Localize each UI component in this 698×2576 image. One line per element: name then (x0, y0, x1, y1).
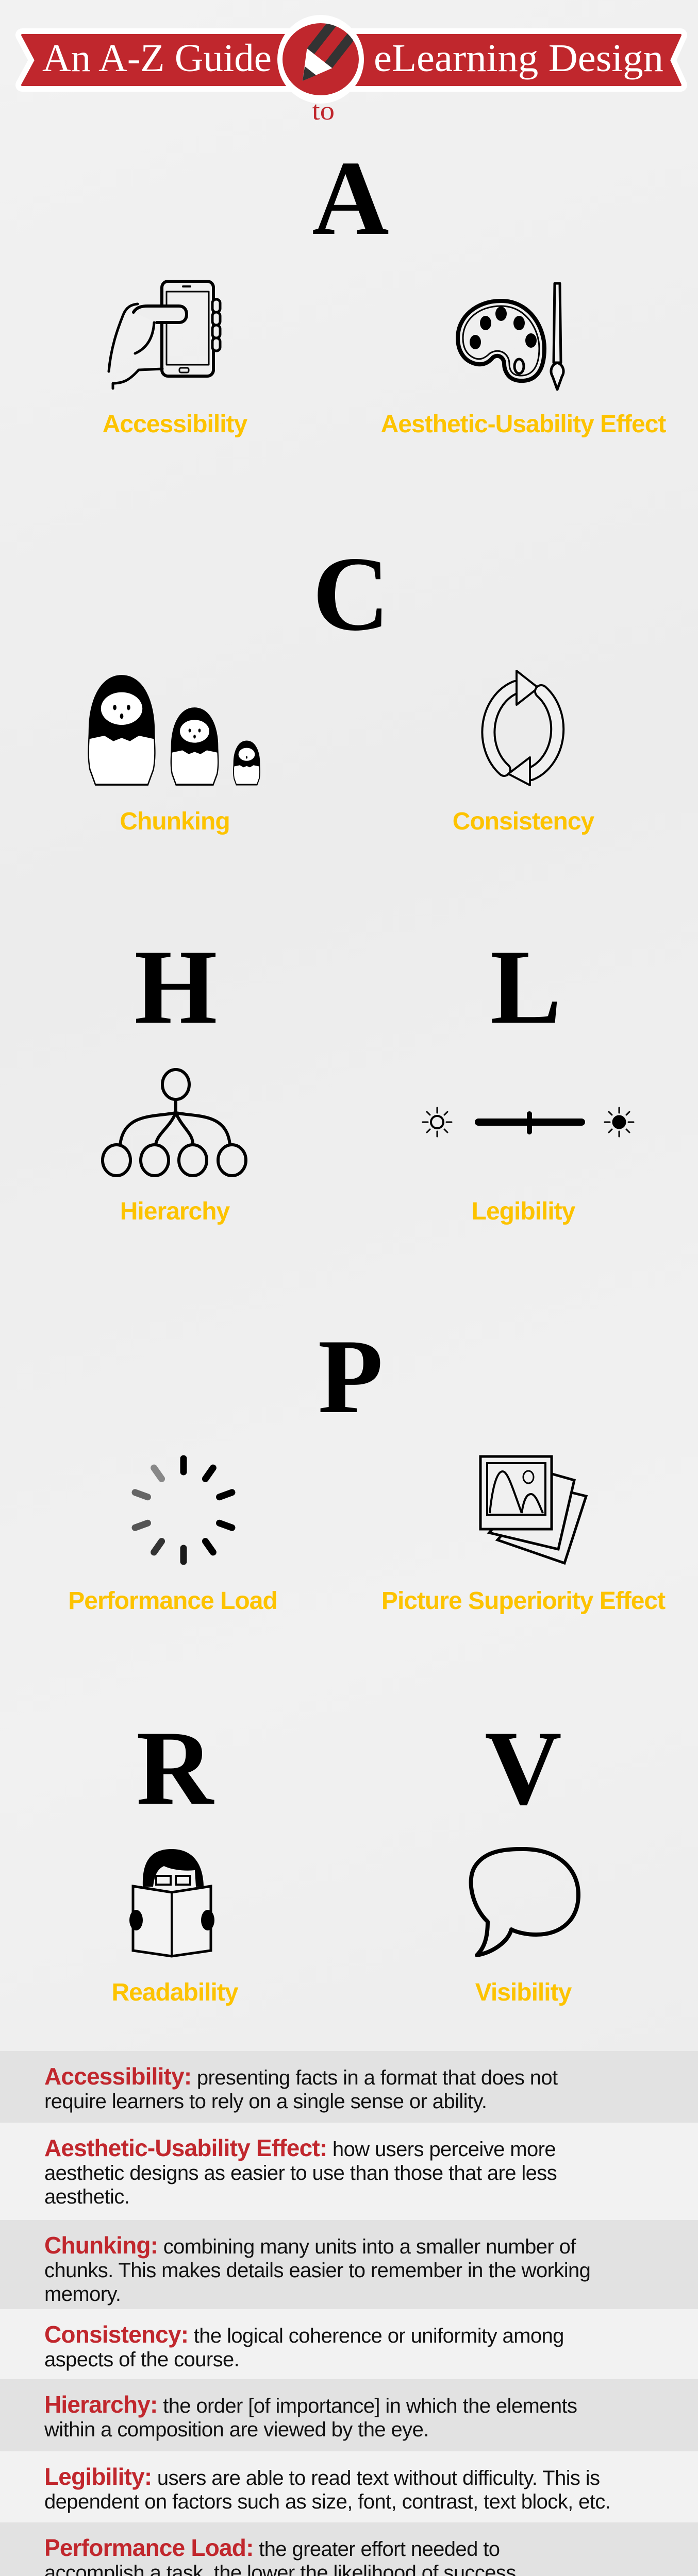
icon: speech bubble (471, 1849, 578, 1955)
icon: hand holding phone (109, 281, 220, 388)
definition: Legibility (0, 2451, 698, 2522)
icon: loading spinner (135, 1459, 232, 1562)
section: H and L (101, 943, 634, 1225)
definition: Chunking (0, 2220, 698, 2309)
label: Legibility: Legibility (472, 1198, 576, 1225)
section: P (68, 1334, 666, 1615)
definition: Chunking: memory. (44, 2283, 121, 2306)
definition: Legibility: Legibility: users are able to read text without difficulty. This is (44, 2463, 600, 2490)
label: Readability: Readability (111, 1979, 239, 2006)
icon: person reading (129, 1849, 214, 1956)
glossary panel (0, 2051, 698, 2576)
icon: stacked photos (480, 1456, 586, 1563)
label: Aesthetic-Usability Effect: Aesthetic-Usability Effect (381, 411, 666, 438)
doll large (89, 676, 155, 785)
definition: Consistency: aspects of the course. (44, 2348, 239, 2371)
doll small (234, 741, 260, 785)
section: R and V (111, 1726, 580, 2006)
section: A (103, 155, 666, 438)
definition: Hierarchy (0, 2379, 698, 2451)
label: Performance Load: Performance Load (68, 1587, 277, 1615)
definition: Performance Load (0, 2522, 698, 2576)
icon: hierarchy tree (103, 1070, 246, 1176)
definition: Hierarchy: Hierarchy: the order [of importance] in which the elements (44, 2391, 577, 2418)
title right: eLearning Design (374, 37, 663, 80)
definition: Hierarchy: within a composition are viewed by the eye. (44, 2418, 429, 2441)
title left: An A-Z Guide (42, 37, 272, 80)
definition: Aesthetic-Usability Effect (0, 2123, 698, 2220)
definition: Accessibility: require learners to rely on a single sense or ability. (44, 2090, 487, 2113)
definition: Aesthetic-Usability Effect: aesthetic designs as easier to use than those that are less (44, 2162, 557, 2184)
icon: pencil badge (277, 15, 364, 104)
definition: Legibility: dependent on factors such as size, font, contrast, text block, etc. (44, 2490, 610, 2513)
icon: brightness slider (423, 1108, 634, 1137)
definition: Aesthetic-Usability Effect: aesthetic. (44, 2185, 129, 2208)
definition: Consistency (0, 2309, 698, 2379)
ribbon (22, 35, 680, 85)
label: Hierarchy: Hierarchy (120, 1198, 230, 1225)
header banner (15, 15, 687, 126)
section: C (88, 551, 595, 835)
icon: refresh arrows (488, 671, 557, 785)
subtitle: to: to (312, 96, 335, 126)
label: Visibility: Visibility (475, 1979, 572, 2006)
definition: Performance Load: Performance Load: the greater effort needed to (44, 2534, 500, 2561)
definition: Aesthetic-Usability Effect: Aesthetic-Usability Effect: how users perceive more (44, 2134, 556, 2161)
label: Accessibility: Accessibility (103, 411, 248, 438)
label: Picture Superiority Effect: Picture Superiority Effect (381, 1587, 666, 1615)
label: Consistency: Consistency (453, 808, 595, 835)
doll medium (171, 708, 218, 785)
definition: Chunking: Chunking: combining many units into a smaller number of (44, 2232, 576, 2259)
definition: Chunking: chunks. This makes details easier to remember in the working (44, 2259, 590, 2282)
icon: palette and brush (458, 283, 563, 389)
definition: Consistency: Consistency: the logical coherence or uniformity among (44, 2321, 564, 2348)
definition: Accessibility (0, 2051, 698, 2123)
definition: Accessibility: Accessibility: presenting facts in a format that does not (44, 2063, 558, 2090)
label: Chunking: Chunking (120, 808, 230, 835)
icon: nesting dolls (89, 676, 260, 785)
